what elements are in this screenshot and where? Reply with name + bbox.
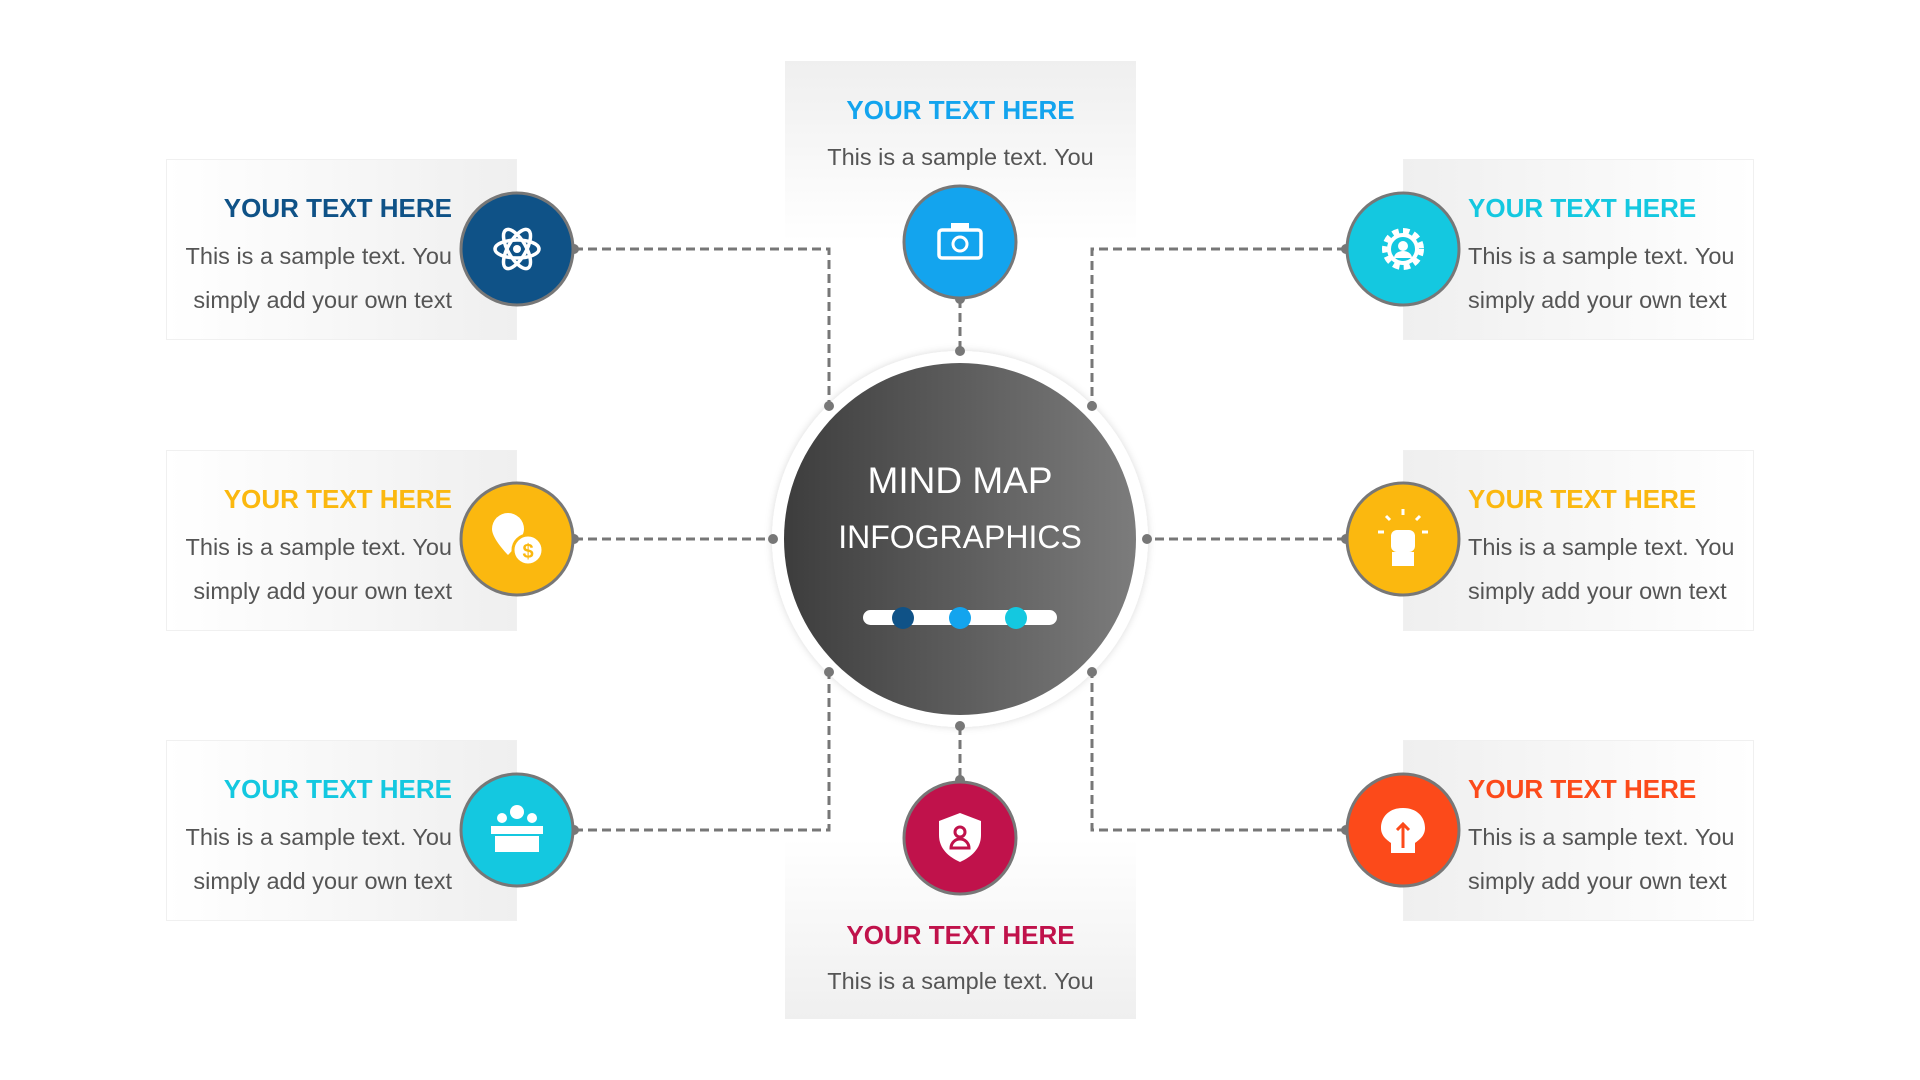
heading: YOUR TEXT HERE [1468,774,1696,804]
connectors [574,249,1346,830]
panel: mid-right [1403,450,1754,631]
heading: YOUR TEXT HERE [224,484,452,514]
text block: This is a sample text. You [186,824,452,850]
text block: simply add your own text [193,868,452,894]
panel: bottom-left [166,740,517,921]
text block [1468,243,1734,313]
connector dots [569,244,1351,835]
text block [186,824,452,894]
text block [186,243,452,313]
text block: This is a sample text. You [1468,824,1734,850]
text block: This is a sample text. You [1468,534,1734,560]
panel: mid-left [166,450,517,631]
panel: bottom [785,838,1136,1019]
text block [1468,534,1734,604]
heading: YOUR TEXT HERE [846,920,1075,950]
text block: This is a sample text. You [827,968,1094,994]
text block [186,534,452,604]
heading: YOUR TEXT HERE [846,95,1075,125]
text block: simply add your own text [1468,578,1727,604]
text block: This is a sample text. You [186,534,452,560]
text block: simply add your own text [193,287,452,313]
central circle: MIND MAP [868,460,1052,501]
central circle: INFOGRAPHICS [838,519,1082,555]
icon: money pin [461,483,573,595]
text block: This is a sample text. You [186,243,452,269]
icon: fist [1347,483,1459,595]
text block: This is a sample text. You [1468,243,1734,269]
heading: YOUR TEXT HERE [224,774,452,804]
text block: This is a sample text. You [827,144,1094,170]
text block [1468,824,1734,894]
panel: top-right [1403,159,1754,340]
heading: YOUR TEXT HERE [1468,193,1696,223]
text block: simply add your own text [1468,287,1727,313]
icon: money pin: $ [522,541,534,563]
icon: brain [1347,774,1459,886]
icon: camera [904,186,1016,298]
icon: meeting [461,774,573,886]
central circle [772,351,1148,727]
text block: simply add your own text [1468,868,1727,894]
icon: atom [461,193,573,305]
icon: gear [1347,193,1459,305]
text block: simply add your own text [193,578,452,604]
panel: top-left [166,159,517,340]
icon: shield user [904,782,1016,894]
panel: top [785,61,1136,242]
panel: bottom-right [1403,740,1754,921]
heading: YOUR TEXT HERE [1468,484,1696,514]
heading: YOUR TEXT HERE [224,193,452,223]
